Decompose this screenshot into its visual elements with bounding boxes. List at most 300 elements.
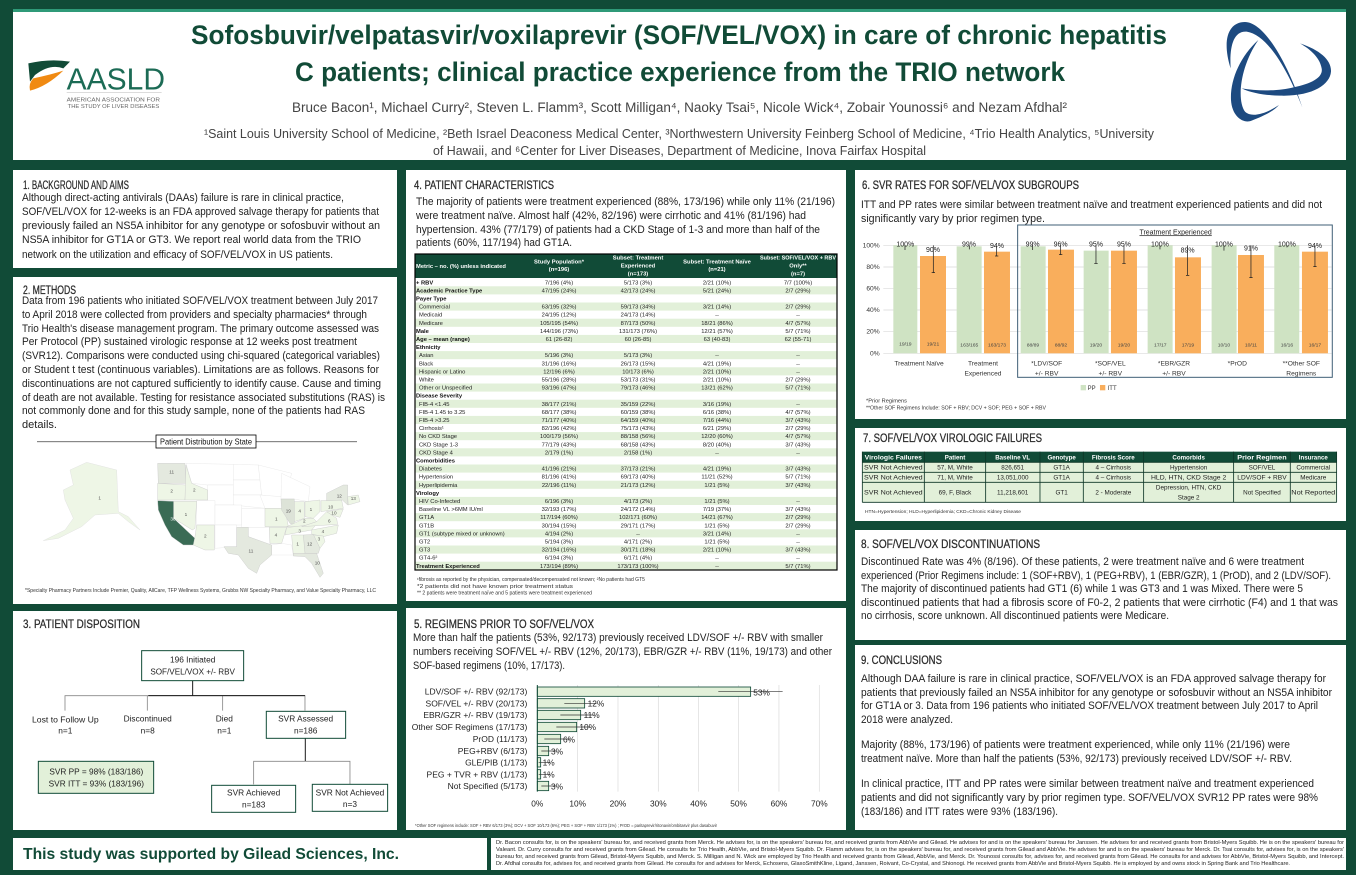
table: patient characteristics: 29/171 (17%) bbox=[621, 523, 655, 529]
table footnotes: ** 2 patients were treatment naïve and 5 patients were treatment experienced bbox=[417, 590, 592, 596]
table: patient characteristics: 2/7 (29%) bbox=[785, 378, 811, 384]
logo: AASLD: AMERICAN ASSOCIATION FOR bbox=[67, 97, 160, 103]
table: patient characteristics: HIV Co-Infected bbox=[419, 499, 460, 505]
panel: background and aims bbox=[13, 170, 397, 268]
table: virologic failures: 57, M, White bbox=[937, 464, 973, 471]
table: patient characteristics: 59/173 (34%) bbox=[621, 305, 655, 311]
table: patient characteristics: 5/7 (71%) bbox=[785, 329, 811, 335]
table: patient characteristics: 68/177 (38%) bbox=[542, 410, 576, 416]
panel: funding statement: This study was supported by Gilead Sciences, Inc. bbox=[23, 846, 399, 863]
table: virologic failures: Genotype bbox=[1047, 454, 1076, 461]
map: patient distribution by state: 38 bbox=[170, 517, 176, 522]
map: patient distribution by state: 2 bbox=[204, 534, 207, 539]
table: patient characteristics: 4/7 (57%) bbox=[785, 321, 811, 327]
panel: disclosures: Valeant. Dr. Curry consults for and received grants from Gilead. He consults for Trio Health, AbbVie, and Bristol-Myers Squibb. Dr. Flamm advises for, is on the speakers' bureau for, and received grants from Gilead and AbbVie. He advises for and is on the speakers' bureau for Merck. Dr. Tsai consults for, advises for, is on the speakers' bbox=[496, 847, 1344, 853]
map: patient distribution by state: 12 bbox=[307, 542, 313, 547]
flow diagram: n=3 bbox=[343, 799, 357, 809]
table: virologic failures bbox=[862, 452, 1337, 502]
text block: Trio Health's disease management program. The primary outcome assessed was bbox=[22, 323, 379, 335]
bar chart: SVR rates: *LDV/SOF bbox=[1031, 361, 1062, 368]
table: patient characteristics: 12/196 (6%) bbox=[543, 369, 575, 375]
map: patient distribution by state: 1 bbox=[310, 507, 313, 512]
map: patient distribution by state: 1 bbox=[296, 542, 299, 547]
table: virologic failures: LDV/SOF + RBV bbox=[1237, 474, 1287, 481]
table: patient characteristics: 35/159 (22%) bbox=[621, 402, 655, 408]
bar chart: prior regimens: GLE/PIB (1/173) bbox=[465, 757, 527, 767]
bar chart: SVR rates: Treatment Naïve bbox=[894, 361, 944, 368]
table: patient characteristics: GT1B bbox=[419, 523, 434, 529]
table: patient characteristics: 5/194 (3%) bbox=[545, 540, 573, 546]
table: virologic failures: SVR Not Achieved bbox=[864, 489, 923, 496]
heading: 6. SVR RATES FOR SOF/VEL/VOX SUBGROUPS bbox=[862, 180, 1079, 192]
table: virologic failures: 2 - Moderate bbox=[1095, 489, 1132, 496]
table: patient characteristics: Payer Type bbox=[416, 296, 447, 302]
table: patient characteristics: 4/173 (2%) bbox=[624, 499, 652, 505]
text block: 2018 were analyzed. bbox=[861, 714, 953, 726]
table: patient characteristics: 21/173 (12%) bbox=[621, 483, 655, 489]
table: patient characteristics: Subset: Treatment Naïve bbox=[683, 260, 752, 266]
table: virologic failures: 13,051,000 bbox=[997, 474, 1029, 481]
footnotes: **Other SOF Regimens Include: SOF + RBV; DCV + SOF; PEG + SOF + RBV bbox=[866, 406, 1047, 412]
table: patient characteristics: 30/171 (18%) bbox=[621, 548, 655, 554]
table: patient characteristics: Black bbox=[419, 361, 433, 367]
text block bbox=[861, 556, 1338, 622]
table: patient characteristics: 3/7 (43%) bbox=[785, 442, 811, 448]
map: patient distribution by state: 12 bbox=[337, 493, 342, 498]
table: patient characteristics: 3/7 (43%) bbox=[785, 507, 811, 513]
map: patient distribution by state: 10 bbox=[331, 511, 337, 516]
map: patient distribution by state: 10 bbox=[328, 504, 334, 509]
bar chart: SVR rates: 90% bbox=[926, 247, 940, 254]
text block: were treatment naïve. Almost half (42%, 82/196) were cirrhotic and 41% (81/196) had bbox=[415, 210, 806, 222]
map: patient distribution by state: 1 bbox=[98, 495, 101, 500]
text block: SOF-based regimens (10%, 17/173). bbox=[413, 660, 565, 672]
bar chart: prior regimens: 0% bbox=[531, 799, 544, 809]
table: patient characteristics: 77/179 (43%) bbox=[542, 442, 576, 448]
text block: patients that previously failed an NS5A inhibitor for any genotype or sofosbuvir without an NS5A inhibitor bbox=[861, 687, 1332, 699]
table: patient characteristics: -- bbox=[796, 450, 800, 456]
flow diagram bbox=[32, 651, 388, 812]
table: virologic failures: GT1A bbox=[1053, 464, 1071, 471]
table: virologic failures: Comorbids bbox=[1172, 454, 1205, 461]
table: patient characteristics: 3/7 (43%) bbox=[785, 467, 811, 473]
text block: no cirrhosis, score unknown. All discontinued patients were Medicare. bbox=[861, 610, 1169, 622]
table: patient characteristics: White bbox=[419, 378, 434, 384]
panel: discontinuations bbox=[855, 530, 1346, 640]
bar chart: SVR rates: *SOF/VEL bbox=[1095, 361, 1126, 368]
table: patient characteristics: 68/158 (43%) bbox=[621, 442, 655, 448]
table: patient characteristics: GT3 bbox=[419, 548, 430, 554]
table: virologic failures: 71, M, White bbox=[937, 474, 973, 481]
table: patient characteristics: 4/21 (19%) bbox=[703, 361, 731, 367]
table: patient characteristics: -- bbox=[796, 369, 800, 375]
table: patient characteristics: Medicaid bbox=[419, 313, 442, 319]
table: patient characteristics: FIB-4 >3.25 bbox=[419, 418, 449, 424]
panel: disclosures: Dr. Afdhal consults for, advises for, and received grants from Gilead. He consults for and advises for Merck, Echosens, GlaxoSmithKline, Ligand, Janssen, Roivant, Co-Crystal, and Shionogi. He received grants from AbbVie and Bristol-Myers Squibb. He is employed by and owns stock in Spring Bank and Trio Healthcare. bbox=[496, 861, 1290, 867]
table: patient characteristics: 5/173 (3%) bbox=[624, 280, 652, 286]
bar chart: prior regimens: PEG+RBV (6/173) bbox=[458, 746, 527, 756]
map: patient distribution by state: 10 bbox=[315, 560, 320, 565]
map: patient distribution by state: 1 bbox=[275, 517, 278, 522]
map: patient distribution by state: 1 bbox=[185, 512, 188, 517]
flow diagram: n=1 bbox=[217, 726, 232, 736]
table: patient characteristics: 2/7 (29%) bbox=[785, 305, 811, 311]
bar chart: SVR rates: 16/17 bbox=[1309, 342, 1321, 348]
footnote: *Other SOF regimens include: SOF + RBV 6/173 (3%); DCV + SOF 10/173 (6%); PEG + SOF + RBV 1/173 (1%) ; PrOD = paritaprevir/ritonavir/ombitasvir plus dasabuvir bbox=[415, 823, 717, 828]
table: patient characteristics: 71/177 (40%) bbox=[542, 418, 576, 424]
table: patient characteristics: Hyperlipidemia bbox=[419, 483, 458, 489]
table: virologic failures: Fibrosis Score bbox=[1092, 454, 1135, 461]
table: patient characteristics: 5/173 (3%) bbox=[624, 353, 652, 359]
table: patient characteristics: 37/173 (21%) bbox=[621, 467, 655, 473]
table: patient characteristics bbox=[415, 254, 837, 570]
bar chart: SVR rates: 100% bbox=[1278, 242, 1296, 249]
table: patient characteristics: 18/21 (86%) bbox=[701, 321, 733, 327]
table: patient characteristics: Experienced bbox=[621, 264, 656, 270]
table: patient characteristics: 24/195 (12%) bbox=[542, 313, 576, 319]
table: patient characteristics: 117/194 (60%) bbox=[540, 515, 578, 521]
affiliations: ¹Saint Louis University School of Medicine, ²Beth Israel Deaconess Medical Center, ³Northwestern University Feinberg School of Medicine, ⁴Trio Health Analytics, ⁵University bbox=[204, 126, 1154, 141]
panel: disclosures: bureau for, and received grants from Gilead, Bristol-Myers Squibb, and Merck. S. Milligan and N. Wick are employed by Trio Health and received grants from Gilead, AbbVie, and Merck. Dr. Younossi consults for, advises for, and received grants from Gilead. He consults for and advises for AbbVie, Bristol-Myers Squibb, and Intercept. bbox=[496, 854, 1344, 860]
text block: Discontinued Rate was 4% (8/196). Of these patients, 2 were treatment naïve and 6 were treatment bbox=[861, 556, 1304, 568]
heading: 5. REGIMENS PRIOR TO SOF/VEL/VOX bbox=[414, 619, 594, 631]
panel: conclusions bbox=[855, 645, 1346, 830]
map title bbox=[37, 435, 357, 448]
flow diagram: Died bbox=[216, 714, 233, 724]
table: patient characteristics: 93/196 (47%) bbox=[542, 386, 576, 392]
table: patient characteristics: Subset: Treatment bbox=[613, 256, 663, 262]
table: patient characteristics: Comorbidities bbox=[416, 458, 455, 464]
table: virologic failures: 826,651 bbox=[1001, 464, 1025, 471]
heading: 2. METHODS bbox=[23, 285, 76, 297]
table: virologic failures: SVR Not Achieved bbox=[864, 464, 923, 471]
table: patient characteristics: Study Population* bbox=[534, 260, 585, 266]
table: patient characteristics: 3/21 (14%) bbox=[703, 305, 731, 311]
bar chart: SVR rates: 89% bbox=[1181, 248, 1195, 255]
text block: patients (60%, 117/194) had GT1A. bbox=[416, 237, 572, 249]
bar chart: SVR rates: 20% bbox=[866, 329, 880, 336]
bar chart: prior regimens: PEG + TVR + RBV (1/173) bbox=[427, 769, 527, 779]
text block: for GT1A or 3. Data from 196 patients who initiated SOF/VEL/VOX treatment between July 2017 to April bbox=[861, 700, 1318, 712]
text block: not commonly done and for this study sample, none of the patients had RAS bbox=[22, 405, 365, 417]
table: patient characteristics: 7/16 (44%) bbox=[703, 418, 731, 424]
bar chart: prior regimens: 10% bbox=[569, 799, 587, 809]
bar chart: prior regimens: 50% bbox=[730, 799, 748, 809]
table: patient characteristics: 47/195 (24%) bbox=[542, 288, 576, 294]
bar chart: SVR rates: 19/20 bbox=[1090, 342, 1102, 348]
table: patient characteristics: 1/21 (5%) bbox=[704, 499, 730, 505]
table: patient characteristics: Asian bbox=[419, 353, 434, 359]
table: patient characteristics: FIB-4 <1.45 bbox=[419, 402, 449, 408]
table: patient characteristics: 10/173 (6%) bbox=[622, 369, 654, 375]
table: patient characteristics: 62 (55-71) bbox=[785, 337, 811, 343]
table: patient characteristics: 61 (26-82) bbox=[546, 337, 572, 343]
text block: More than half the patients (53%, 92/173) previously received LDV/SOF +/- RBV with smaller bbox=[413, 632, 823, 644]
bar chart: SVR rates: +/- RBV bbox=[1099, 371, 1123, 378]
table: patient characteristics: 2/158 (1%) bbox=[624, 450, 652, 456]
callout: SVR rates bbox=[38, 761, 154, 793]
table: patient characteristics: 144/196 (73%) bbox=[540, 329, 578, 335]
bar chart: prior regimens: 60% bbox=[771, 799, 788, 809]
text block bbox=[22, 295, 385, 431]
flow diagram: SVR Assessed bbox=[278, 714, 334, 724]
table: patient characteristics: 63/195 (32%) bbox=[542, 305, 576, 311]
text block: NS5A inhibitor for GT1A or GT3. We report real world data from the TRIO bbox=[22, 234, 361, 246]
table: patient characteristics: (n=7) bbox=[791, 272, 805, 278]
table: patient characteristics: 1/21 (5%) bbox=[704, 483, 730, 489]
bar chart: SVR rates: 100% bbox=[863, 243, 880, 250]
table: patient characteristics: 88/158 (56%) bbox=[621, 434, 655, 440]
table: patient characteristics: Hispanic or Latino bbox=[419, 369, 465, 375]
bar chart: prior regimens: 40% bbox=[690, 799, 708, 809]
table: virologic failures: SVR Not Achieved bbox=[864, 474, 923, 481]
text block: In clinical practice, ITT and PP rates were similar between treatment naïve and treatment experienced bbox=[861, 778, 1314, 790]
table: patient characteristics: -- bbox=[796, 353, 800, 359]
bar chart: SVR rates: 95% bbox=[1117, 242, 1131, 249]
table: patient characteristics: Subset: SOF/VEL/VOX + RBV bbox=[760, 256, 836, 262]
flow diagram: n=1 bbox=[58, 726, 73, 736]
flow diagram: Lost to Follow Up bbox=[32, 715, 99, 725]
table: patient characteristics: 6/171 (4%) bbox=[624, 556, 652, 562]
table: patient characteristics: 11/21 (52%) bbox=[701, 475, 733, 481]
table: patient characteristics: 55/196 (28%) bbox=[542, 378, 576, 384]
bar chart: prior regimens: 70% bbox=[811, 799, 828, 809]
table: patient characteristics: Male bbox=[416, 329, 430, 335]
table: patient characteristics: Academic Practice Type bbox=[416, 288, 483, 294]
text block bbox=[415, 196, 835, 249]
table: patient characteristics: Metric – no. (%) unless indicated bbox=[416, 264, 506, 270]
bar chart: SVR rates: 88/89 bbox=[1027, 342, 1039, 348]
table: patient characteristics: Diabetes bbox=[419, 467, 442, 473]
bar chart: prior regimens: 6% bbox=[563, 734, 576, 744]
table: patient characteristics: (n=196) bbox=[549, 267, 569, 273]
bar chart: SVR rates: 19/19 bbox=[899, 341, 912, 347]
bar chart: SVR rates: 94% bbox=[1308, 243, 1322, 250]
table: patient characteristics: 4/7 (57%) bbox=[785, 434, 811, 440]
table: patient characteristics: 173/194 (89%) bbox=[540, 564, 578, 570]
bar chart: SVR rates: Experienced bbox=[964, 371, 1002, 378]
table: virologic failures: GT1 bbox=[1055, 489, 1068, 496]
table: patient characteristics: 6/16 (38%) bbox=[703, 410, 731, 416]
table: virologic failures: Depression, HTN, CKD bbox=[1156, 484, 1222, 491]
bar chart: SVR rates: +/- RBV bbox=[1035, 371, 1059, 378]
map: patient distribution by state: 13 bbox=[351, 496, 356, 501]
table: virologic failures: Commercial bbox=[1296, 464, 1330, 471]
table: patient characteristics: 5/7 (71%) bbox=[785, 386, 811, 392]
table: virologic failures: 69, F, Black bbox=[939, 489, 972, 496]
table: patient characteristics: 41/196 (21%) bbox=[542, 467, 576, 473]
table: patient characteristics: -- bbox=[796, 313, 800, 319]
table: patient characteristics: 75/173 (43%) bbox=[621, 426, 655, 432]
table: patient characteristics: 6/194 (3%) bbox=[545, 556, 573, 562]
table: virologic failures: Medicare bbox=[1300, 474, 1327, 481]
table: patient characteristics: 2/21 (10%) bbox=[703, 280, 731, 286]
table: patient characteristics: 2/21 (10%) bbox=[703, 548, 731, 554]
table: virologic failures: Stage 2 bbox=[1178, 495, 1200, 502]
text block bbox=[861, 199, 1322, 225]
logo: AASLD bbox=[28, 60, 165, 110]
text block: Data from 196 patients who initiated SOF/VEL/VOX treatment between July 2017 bbox=[22, 295, 378, 307]
text block: of death are not available. Testing for resistance associated substitutions (RAS) is bbox=[22, 392, 385, 404]
panel: patient characteristics bbox=[406, 170, 846, 601]
table: patient characteristics: 63 (40-83) bbox=[704, 337, 730, 343]
callout: SVR rates: SVR PP = 98% (183/186) bbox=[49, 767, 144, 777]
table: patient characteristics: GT1A bbox=[419, 515, 434, 521]
text block: treatment naïve. More than half the patients (53%, 92/173) previously received LDV/SOF +/- RBV. bbox=[861, 753, 1292, 765]
table: patient characteristics: 5/196 (3%) bbox=[545, 353, 573, 359]
table: patient characteristics: No CKD Stage bbox=[419, 434, 457, 440]
table: patient characteristics: Treatment Experienced bbox=[416, 564, 480, 570]
text block: discontinuations are not captured sufficiently to identify cause. Cause and timing bbox=[22, 378, 381, 390]
panel: methods bbox=[13, 277, 397, 604]
bar chart: prior regimens: 3% bbox=[551, 746, 564, 756]
table: patient characteristics: 12/20 (60%) bbox=[701, 434, 733, 440]
bar chart: SVR rates: *EBR/GZR bbox=[1158, 361, 1190, 368]
table: patient characteristics: -- bbox=[796, 531, 800, 537]
table: patient characteristics: Other or Unspecified bbox=[419, 386, 472, 392]
table: patient characteristics: Disease Severity bbox=[416, 394, 463, 400]
bar chart: SVR rates: 95% bbox=[1089, 242, 1103, 249]
table: patient characteristics: Hypertension bbox=[419, 475, 453, 481]
table: patient characteristics: 1/21 (5%) bbox=[704, 523, 730, 529]
title: Sofosbuvir/velpatasvir/voxilaprevir (SOF/VEL/VOX) in care of chronic hepatitis bbox=[191, 20, 1167, 50]
text block: numbers receiving SOF/VEL +/- RBV (12%, 20/173), EBR/GZR +/- RBV (11%, 19/173) and other bbox=[413, 646, 832, 658]
table: patient characteristics: 2/21 (10%) bbox=[703, 378, 731, 384]
map: patient distribution by state: 4 bbox=[298, 508, 301, 513]
logo: TRIO blue crescents bbox=[1227, 22, 1331, 121]
table: patient characteristics: 6/21 (29%) bbox=[703, 426, 731, 432]
affiliations: of Hawaii, and ⁶Center for Liver Diseases, Department of Medicine, Inova Fairfax Hospital bbox=[433, 143, 926, 158]
table: patient characteristics: GT1 (subtype mixed or unknown) bbox=[419, 531, 505, 537]
table: patient characteristics: -- bbox=[715, 564, 719, 570]
text block: or Student t test (continuous variables). Limitations are as follows. Reasons for bbox=[22, 364, 379, 376]
table: patient characteristics: 4/7 (57%) bbox=[785, 410, 811, 416]
table: patient characteristics: 69/173 (40%) bbox=[621, 475, 655, 481]
table: virologic failures: HLD, HTN, CKD Stage 2 bbox=[1151, 474, 1227, 481]
table: patient characteristics: 4/21 (19%) bbox=[703, 467, 731, 473]
bar chart: SVR rates: **Other SOF bbox=[1283, 361, 1320, 368]
text block bbox=[413, 632, 832, 672]
logo: AASLD: THE STUDY OF LIVER DISEASES bbox=[68, 104, 160, 110]
table: patient characteristics: 102/171 (60%) bbox=[619, 515, 657, 521]
frame: treatment experienced: Treatment Experienced bbox=[1139, 229, 1212, 236]
table: patient characteristics: 42/173 (24%) bbox=[621, 288, 655, 294]
table: patient characteristics: 2/7 (29%) bbox=[785, 515, 811, 521]
bar chart: SVR rates: 0% bbox=[870, 350, 880, 357]
bar chart: SVR rates: 19/21 bbox=[927, 341, 939, 347]
bar chart: prior regimens: PrOD (11/173) bbox=[473, 734, 527, 744]
table: patient characteristics: 2/179 (1%) bbox=[545, 450, 573, 456]
legend: ITT bbox=[1108, 386, 1117, 392]
bar chart: SVR rates: 17/19 bbox=[1182, 342, 1194, 348]
table: patient characteristics: GT2 bbox=[419, 540, 430, 546]
panel: virologic failures bbox=[855, 428, 1346, 521]
text block: The majority of discontinued patients had GT1 (6) while 1 was GT3 and 1 was Mixed. There were 5 bbox=[861, 583, 1303, 595]
table: virologic failures: Virologic Failures bbox=[865, 454, 923, 461]
text block: Per Protocol (PP) sustained virologic response at 12 weeks post treatment bbox=[22, 336, 357, 348]
frame: treatment experienced bbox=[1018, 225, 1332, 377]
table: patient characteristics: 4/194 (2%) bbox=[545, 531, 573, 537]
table: patient characteristics: 26/173 (15%) bbox=[621, 361, 655, 367]
table: patient characteristics: 24/173 (14%) bbox=[621, 313, 655, 319]
bar chart: SVR rates: 100% bbox=[1215, 242, 1233, 249]
bar chart: SVR rates: +/- RBV bbox=[1162, 371, 1186, 378]
bar chart: SVR rates: 60% bbox=[866, 286, 880, 293]
table: patient characteristics: 5/21 (24%) bbox=[703, 288, 731, 294]
bar chart: SVR rates: 17/17 bbox=[1154, 342, 1167, 348]
table: patient characteristics: 81/196 (41%) bbox=[542, 475, 576, 481]
text block bbox=[22, 192, 380, 261]
table: patient characteristics: 13/21 (62%) bbox=[701, 386, 733, 392]
table: patient characteristics: -- bbox=[715, 353, 719, 359]
map: patient distribution by state bbox=[43, 462, 360, 577]
flow diagram: n=186 bbox=[294, 726, 318, 736]
table: patient characteristics: 2/7 (29%) bbox=[785, 426, 811, 432]
table: patient characteristics: 1/21 (5%) bbox=[704, 540, 730, 546]
text block: to April 2018 were collected from providers and specialty pharmacies* through bbox=[22, 309, 367, 321]
text block: (SVR12). Comparisons were conducted using chi-squared (categorical variables) bbox=[22, 350, 380, 362]
legend: PP bbox=[1088, 386, 1096, 392]
table: patient characteristics: Baseline VL >6MM IU/ml bbox=[419, 507, 483, 513]
bar chart: SVR rates: 99% bbox=[962, 242, 976, 249]
logo: AASLD: AASLD bbox=[67, 62, 165, 96]
bar chart: SVR rates: 99% bbox=[1026, 242, 1040, 249]
text block: discontinued patients that had a fibrosis score of F0-2, 2 patients that were cirrhotic (F4) and 1 that was bbox=[861, 597, 1338, 609]
table: patient characteristics: 105/195 (54%) bbox=[540, 321, 578, 327]
table: patient characteristics: 4/171 (2%) bbox=[624, 540, 652, 546]
bar chart: SVR rates: 80% bbox=[866, 264, 880, 271]
table: patient characteristics: 31/196 (16%) bbox=[542, 361, 576, 367]
text block: hypertension. 43% (77/179) of patients had a CKD Stage of 1-3 and more than half of the bbox=[416, 224, 820, 236]
flow diagram: SVR Achieved bbox=[227, 788, 281, 798]
bar chart: prior regimens: SOF/VEL +/- RBV (20/173) bbox=[426, 698, 527, 708]
title bbox=[191, 20, 1167, 87]
text block: Although direct-acting antivirals (DAAs) failure is rare in clinical practice, bbox=[22, 192, 344, 204]
table: patient characteristics: -- bbox=[796, 402, 800, 408]
bar chart: SVR rates: 100% bbox=[1151, 242, 1169, 249]
table: patient characteristics: + RBV bbox=[416, 280, 433, 286]
heading: 7. SOF/VEL/VOX VIROLOGIC FAILURES bbox=[863, 433, 1042, 445]
footnote: *Specialty Pharmacy Partners Include Premier, Quality, AllCare, TFP Wellness Systems, Grubbs NW Specialty Pharmacy, and Value Specialty Pharmacy, LLC bbox=[25, 588, 376, 594]
text block: SOF/VEL/VOX for 12-weeks is an FDA approved salvage therapy for patients that bbox=[22, 206, 379, 218]
table: virologic failures: SOF/VEL bbox=[1249, 464, 1276, 471]
table: patient characteristics: Ethnicity bbox=[416, 345, 441, 351]
bar chart: SVR rates: 10/11 bbox=[1245, 342, 1257, 348]
table: patient characteristics: -- bbox=[715, 556, 719, 562]
table: patient characteristics: 14/21 (67%) bbox=[701, 515, 733, 521]
table: patient characteristics: (n=21) bbox=[708, 267, 726, 273]
panel: funding statement bbox=[13, 838, 487, 870]
table: patient characteristics: 173/173 (100%) bbox=[617, 564, 659, 570]
table: virologic failures: Baseline VL bbox=[995, 454, 1030, 461]
table: virologic failures: Hypertension bbox=[1170, 464, 1208, 471]
bar chart: prior regimens bbox=[412, 685, 828, 809]
table: patient characteristics: 3/21 (14%) bbox=[703, 531, 731, 537]
table: patient characteristics: Medicare bbox=[419, 321, 443, 327]
bar chart: prior regimens: 20% bbox=[610, 799, 627, 809]
bar chart: prior regimens: Other SOF Regimens (17/173) bbox=[412, 722, 527, 732]
table footnotes: ¹fibrosis as reported by the physician, compensated/decompensated not known; ²No patients had GT5 bbox=[417, 577, 645, 583]
map: patient distribution by state: 4 bbox=[275, 533, 278, 538]
bar chart: prior regimens: 10% bbox=[579, 722, 597, 732]
panel: SVR rates bbox=[855, 170, 1346, 419]
table: patient characteristics: -- bbox=[796, 361, 800, 367]
table: patient characteristics: (n=173) bbox=[628, 272, 648, 278]
flow diagram: Discontinued bbox=[124, 714, 172, 724]
table: patient characteristics: 3/16 (19%) bbox=[703, 402, 731, 408]
table: patient characteristics: -- bbox=[796, 556, 800, 562]
table: virologic failures: Prior Regimen bbox=[1237, 454, 1287, 461]
